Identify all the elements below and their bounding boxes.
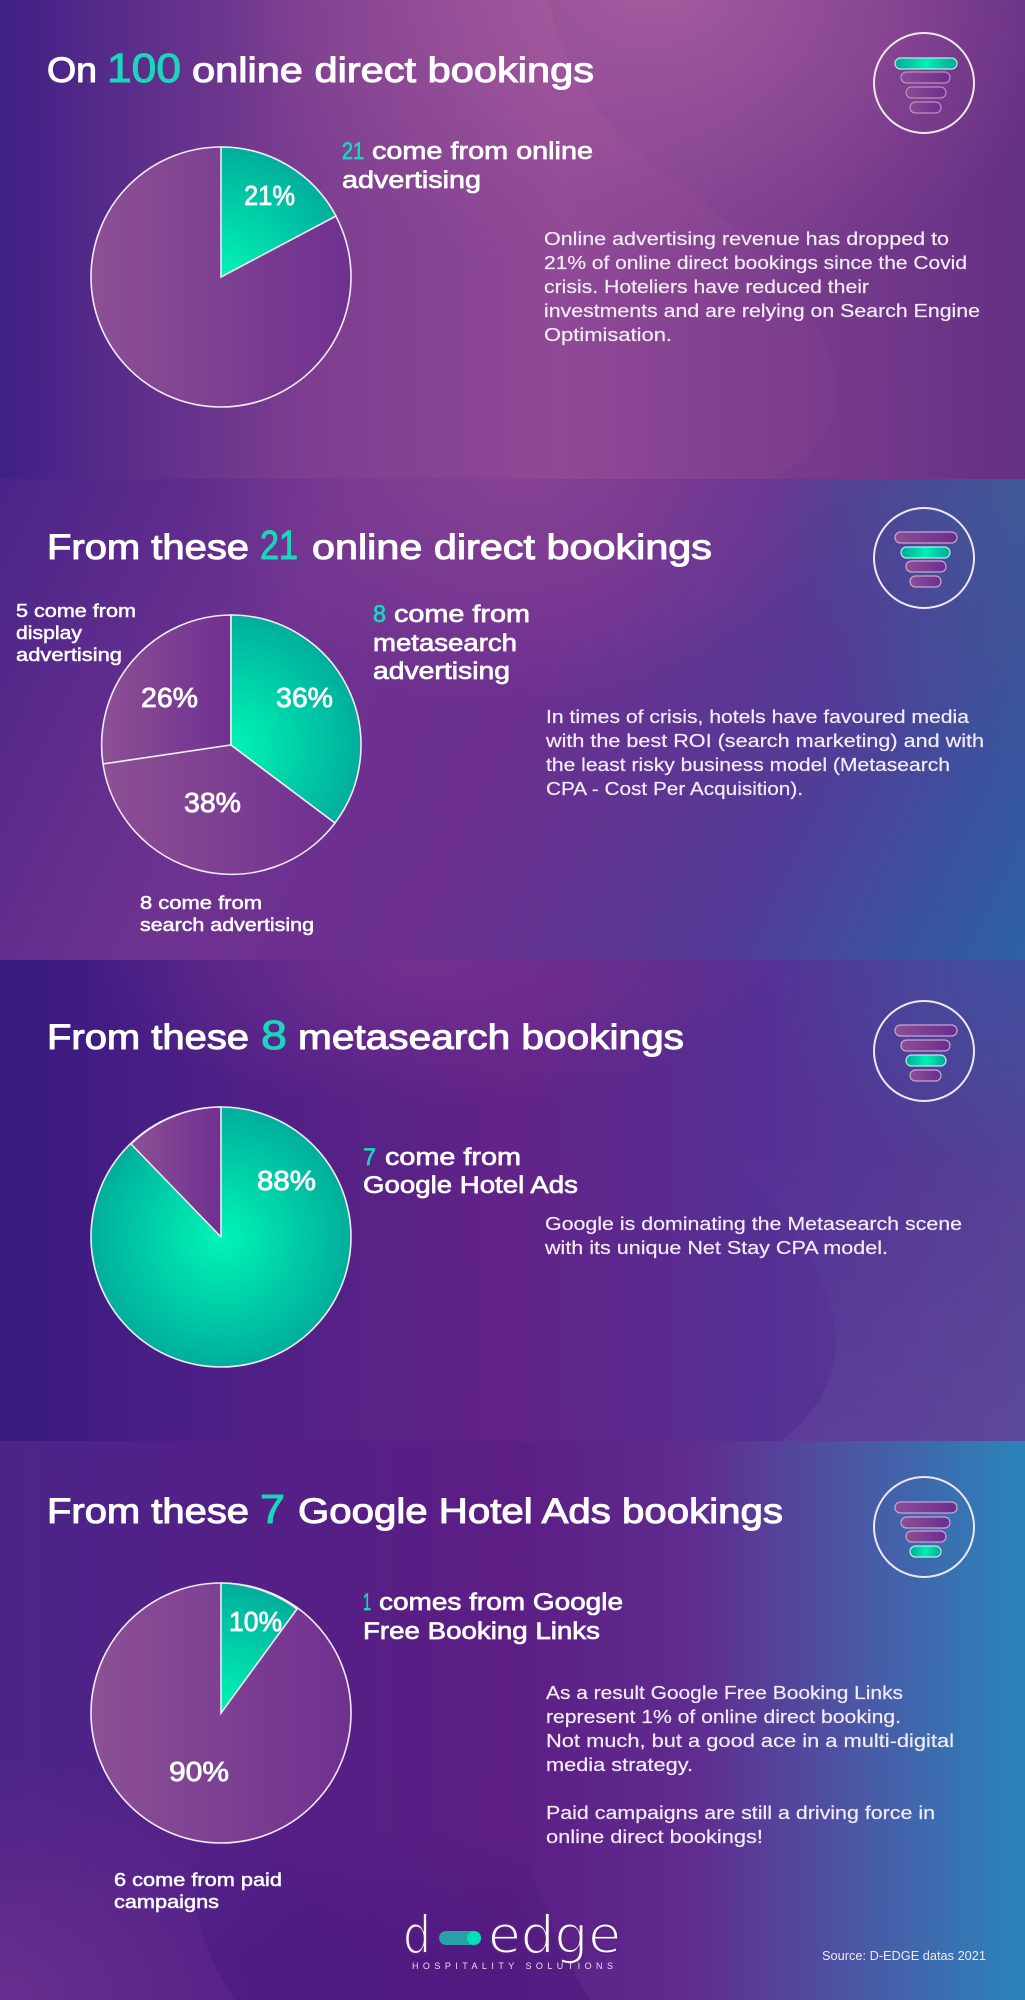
label: Google Free Booking Links: comes from Google: [379, 1589, 623, 1616]
text block: section 4: Paid campaigns are still a driving force in: [546, 1802, 935, 1823]
label: Google Hotel Ads: [363, 1144, 578, 1199]
label: online advertising: advertising: [342, 167, 481, 194]
heading: section 4: 7: [260, 1486, 285, 1532]
text block: section 1: Optimisation.: [544, 324, 672, 345]
label: display advertising: [16, 600, 136, 665]
label: display advertising: display: [16, 622, 83, 643]
heading: section 2: From these: [47, 528, 249, 567]
label: search advertising: 8 come from: [140, 892, 262, 913]
text block: section 3: with its unique Net Stay CPA model.: [544, 1237, 888, 1258]
logo: D-EDGE Hospitality Solutions: edge: [488, 1905, 621, 1966]
heading: section 2: 21: [260, 522, 298, 568]
text block: section 4: online direct bookings!: [546, 1826, 763, 1847]
heading: section 2: [47, 522, 712, 568]
label: paid campaigns: 6 come from paid: [114, 1869, 282, 1890]
heading: section 1: [47, 45, 594, 91]
text block: section 1: [544, 228, 980, 345]
panel: from these 7 Google Hotel Ads bookings: [0, 1441, 1025, 2000]
label: metasearch advertising: [373, 601, 530, 685]
panel: on 100 online direct bookings: [0, 0, 1025, 479]
pie chart: 36 38 26 percent: 36%: [276, 682, 333, 713]
label: metasearch advertising: 8: [373, 601, 386, 628]
text block: section 1: investments and are relying on Search Engine: [544, 300, 980, 321]
heading: section 4: From these: [47, 1492, 249, 1531]
pie chart: 36 38 26 percent: [102, 615, 361, 874]
pie chart: 36 38 26 percent: 38%: [184, 787, 241, 818]
label: Google Free Booking Links: 1: [363, 1589, 371, 1616]
pie chart: 10 and 90 percent: 90%: [169, 1756, 229, 1787]
text block: section 2: In times of crisis, hotels have favoured media: [546, 706, 970, 727]
icon: funnel step 3: [874, 1001, 974, 1101]
label: paid campaigns: [114, 1869, 282, 1912]
panel: from these 21 online direct bookings: [0, 479, 1025, 960]
heading: section 1: online direct bookings: [192, 51, 594, 90]
pie chart: 21 percent: 21%: [244, 180, 295, 211]
label: display advertising: advertising: [16, 644, 122, 665]
pie chart: 10 and 90 percent: 10%: [229, 1606, 282, 1637]
text block: section 2: with the best ROI (search marketing) and with: [545, 730, 984, 751]
label: Google Hotel Ads: Google Hotel Ads: [363, 1172, 578, 1199]
text block: section 1: crisis. Hoteliers have reduced their: [544, 276, 869, 297]
text block: section 3: [544, 1213, 962, 1258]
heading: section 4: [47, 1486, 783, 1532]
text block: section 2: [545, 706, 984, 799]
label: search advertising: [140, 892, 314, 935]
icon: funnel step 1: [874, 33, 974, 133]
pie chart: 21 percent: [91, 147, 351, 407]
label: metasearch advertising: metasearch: [373, 630, 517, 657]
label: paid campaigns: campaigns: [114, 1891, 219, 1912]
heading: section 3: 8: [261, 1012, 287, 1058]
heading: section 3: From these: [47, 1018, 249, 1057]
heading: section 2: online direct bookings: [312, 528, 712, 567]
heading: section 1: On: [47, 51, 97, 90]
icon: funnel step 4: [874, 1477, 974, 1577]
text block: section 2: the least risky business model (Metasearch: [546, 754, 950, 775]
heading: section 1: 100: [107, 45, 181, 91]
pie chart: 88 percent: [91, 1107, 351, 1367]
logo: D-EDGE Hospitality Solutions: HOSPITALITY SOLUTIONS: [412, 1961, 613, 1971]
text block: section 2: CPA - Cost Per Acquisition).: [546, 778, 803, 799]
heading: section 4: Google Hotel Ads bookings: [298, 1492, 783, 1531]
label: metasearch advertising: come from: [394, 601, 530, 628]
text block: section 4: media strategy.: [546, 1754, 693, 1775]
label: Google Hotel Ads: come from: [385, 1144, 521, 1171]
text block: section 1: Online advertising revenue has dropped to: [544, 228, 949, 249]
text block: section 4: represent 1% of online direct booking.: [546, 1706, 901, 1727]
text block: section 1: 21% of online direct bookings since the Covid: [544, 252, 967, 273]
text block: section 4: As a result Google Free Booking Links: [546, 1682, 903, 1703]
label: display advertising: 5 come from: [16, 600, 136, 621]
icon: funnel step 2: [874, 508, 974, 608]
pie chart: 10 and 90 percent: [91, 1583, 351, 1843]
heading: section 3: [47, 1012, 684, 1058]
logo: D-EDGE Hospitality Solutions: d: [403, 1905, 431, 1966]
text block: section 4: Not much, but a good ace in a multi-digital: [546, 1730, 954, 1751]
pie chart: 36 38 26 percent: 26%: [141, 682, 198, 713]
panel: from these 8 metasearch bookings: [0, 960, 1025, 1441]
label: metasearch advertising: advertising: [373, 658, 510, 685]
logo: D-EDGE Hospitality Solutions: [403, 1905, 621, 1971]
label: online advertising: come from online: [372, 138, 593, 165]
label: Google Free Booking Links: Free Booking Links: [363, 1618, 600, 1645]
heading: section 3: metasearch bookings: [298, 1018, 684, 1057]
label: Google Hotel Ads: 7: [363, 1144, 376, 1171]
text block: section 3: Google is dominating the Metasearch scene: [545, 1213, 962, 1234]
label: online advertising: [342, 138, 593, 194]
label: Google Free Booking Links: [363, 1589, 623, 1645]
label: online advertising: 21: [342, 138, 364, 165]
pie chart: 88 percent: 88%: [257, 1165, 316, 1196]
source note: Source: D-EDGE datas 2021: [822, 1948, 986, 1963]
text block: section 4: [546, 1682, 954, 1847]
label: search advertising: search advertising: [140, 914, 314, 935]
